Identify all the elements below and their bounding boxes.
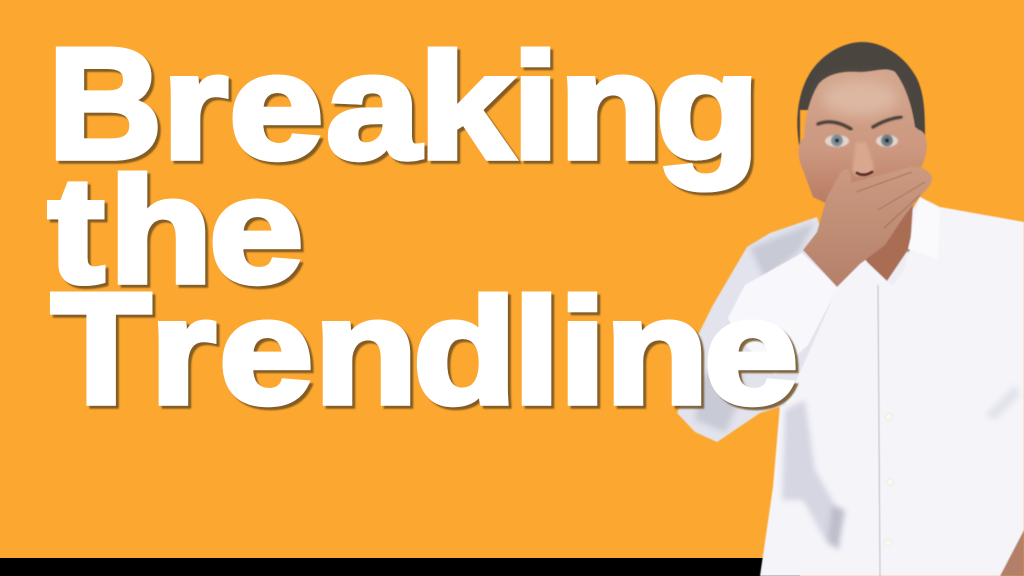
hand	[803, 167, 932, 287]
nose	[852, 142, 874, 176]
hair	[797, 42, 925, 150]
finger lines	[856, 172, 925, 228]
shirt buttons	[884, 414, 894, 546]
headline	[48, 16, 798, 437]
face	[799, 70, 927, 205]
eyebrows	[818, 117, 901, 129]
neck	[840, 205, 913, 281]
person	[677, 42, 1024, 576]
raised arm sleeve	[677, 217, 838, 442]
headline line 3: T	[51, 261, 151, 437]
headline line 1: reaking	[162, 22, 760, 190]
headline line 3: rendline	[150, 267, 798, 435]
placket line	[878, 285, 880, 576]
shirt cuff	[728, 253, 838, 375]
forehead highlight	[822, 80, 898, 116]
black bottom bar	[0, 558, 800, 576]
lower hand	[1000, 530, 1024, 576]
collar	[908, 197, 940, 259]
sleeve shading	[695, 222, 815, 432]
headline line 2: the	[48, 146, 303, 314]
shirt shading	[782, 385, 1020, 550]
headline line 1: B	[48, 16, 162, 192]
eyes	[825, 134, 898, 147]
shirt body	[760, 197, 1024, 576]
